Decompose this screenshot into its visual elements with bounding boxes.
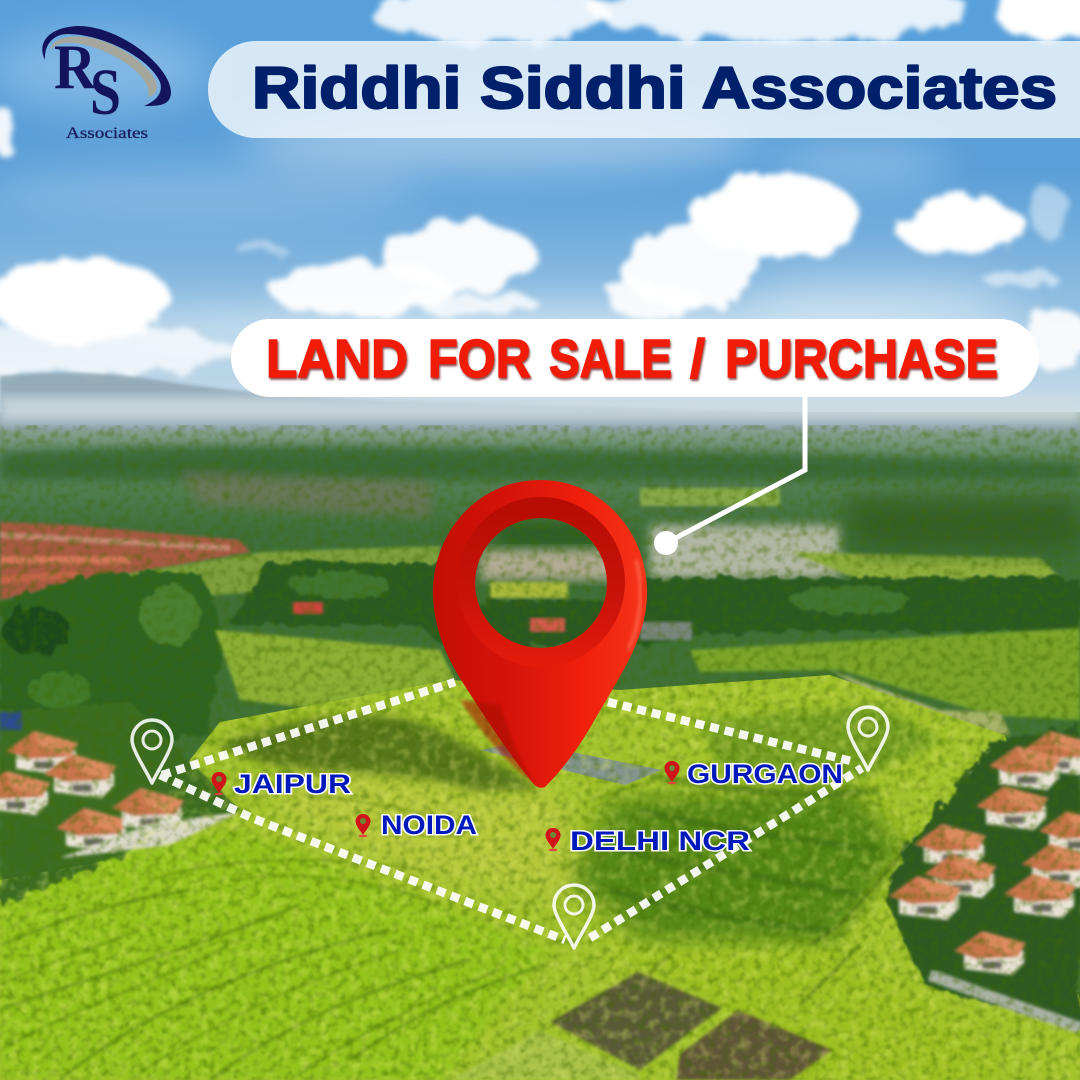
sale headline: FOR (428, 329, 531, 389)
sale headline: SALE (549, 329, 672, 389)
location outline pin: right (848, 707, 888, 770)
clouds (0, 0, 1080, 374)
callout leader line (654, 395, 805, 555)
sale headline banner (231, 319, 1039, 397)
large red map pin (433, 480, 647, 788)
sale headline: PURCHASE (725, 329, 998, 389)
field boundaries and furrows (0, 775, 905, 1080)
tree belt (0, 562, 1080, 745)
left houses (0, 702, 240, 905)
location label: Jaipur: JAIPUR (234, 769, 351, 799)
soft cirrus haze (0, 30, 1060, 354)
logo: S (90, 56, 121, 129)
logo: Associates (66, 125, 148, 142)
photo texture (0, 425, 1080, 1080)
location outline pin: bottom (554, 885, 594, 948)
right village (885, 725, 1080, 1030)
foreground rice fields (0, 675, 1080, 1080)
logo: R (54, 31, 97, 102)
left town rooftops (0, 522, 440, 600)
horizon haze and hills (0, 373, 1080, 430)
bottom dark plots (450, 972, 832, 1080)
plot boundary dotted line (160, 682, 862, 940)
sale headline: / (690, 329, 705, 389)
logo (42, 26, 171, 142)
middle fields (215, 582, 1080, 735)
distant fields and tree bands (0, 445, 1080, 580)
ground base (0, 412, 1080, 1080)
pin shadow on field (215, 715, 540, 790)
company name banner (208, 41, 1080, 138)
sale headline: LAND (266, 329, 408, 389)
location label: Noida: NOIDA (381, 810, 477, 840)
sky background (0, 0, 1080, 430)
grey plot (480, 742, 662, 785)
location outline pin: left (132, 720, 172, 783)
location label: Gurgaon: GURGAON (687, 759, 843, 789)
company name: Riddhi Siddhi Associates (252, 56, 1057, 121)
location label: Delhi NCR: DELHI NCR (570, 826, 750, 856)
